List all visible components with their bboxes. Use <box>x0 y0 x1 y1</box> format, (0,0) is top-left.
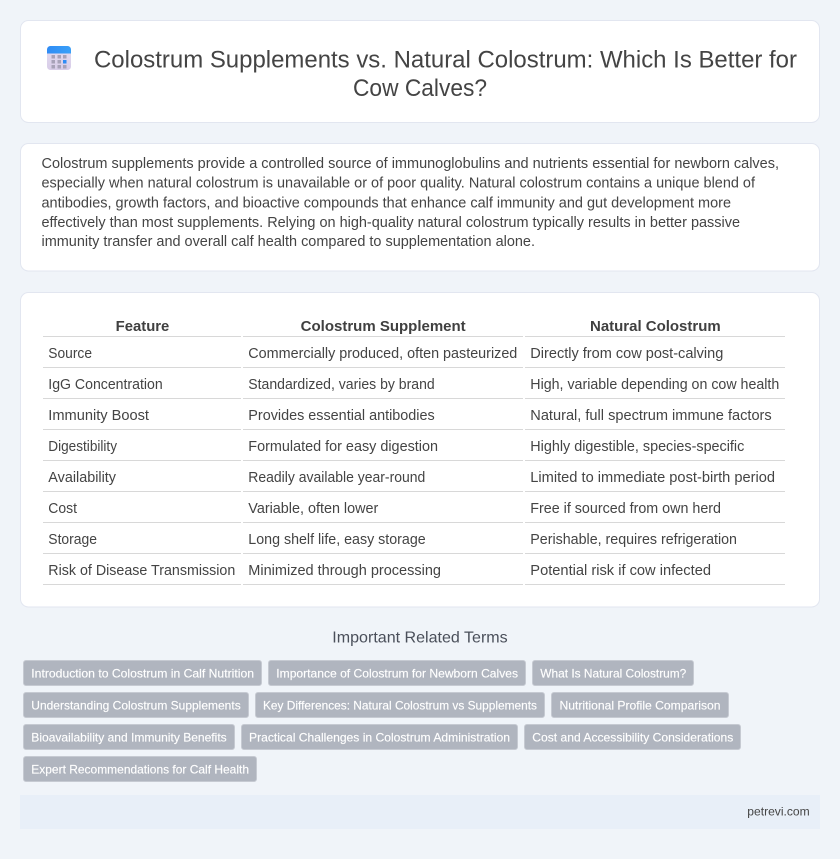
row: cost <box>48 501 721 517</box>
tag <box>256 692 544 718</box>
row: storage: Long shelf life, easy storage <box>248 532 426 548</box>
tag: Practical Challenges in Colostrum Administration <box>249 730 510 744</box>
row: storage <box>48 532 737 548</box>
row: availability <box>48 470 775 486</box>
tag <box>524 724 740 750</box>
text block: intro: effectively than most supplements. Relying on high-quality natural colostrum typically results in better passive <box>42 215 740 231</box>
row: digestibility <box>48 439 744 455</box>
tag: Key Differences: Natural Colostrum vs Supplements <box>263 698 537 712</box>
row: cost: Variable, often lower <box>248 501 379 517</box>
tag <box>24 724 234 750</box>
table header: Natural Colostrum <box>590 319 721 335</box>
tag: Introduction to Colostrum in Calf Nutrition <box>31 666 254 680</box>
row: IgG concentration: High, variable depending on cow health <box>530 377 779 393</box>
row: source: Source <box>48 346 92 362</box>
tag: Expert Recommendations for Calf Health <box>31 762 249 776</box>
table header: Colostrum Supplement <box>301 319 466 335</box>
row: availability: Readily available year-round <box>248 470 425 486</box>
row: risk of disease transmission <box>48 563 711 579</box>
footer: petrevi.com <box>747 805 810 819</box>
row: immunity boost: Immunity Boost <box>48 408 149 424</box>
row: source <box>48 346 723 362</box>
tag <box>24 660 262 686</box>
heading: important related terms: Important Related Terms <box>332 630 508 647</box>
row: storage: Perishable, requires refrigeration <box>530 532 737 548</box>
tag: Nutritional Profile Comparison <box>560 698 720 712</box>
row: immunity boost <box>48 408 772 424</box>
icon: calendar <box>47 46 71 70</box>
tag: Cost and Accessibility Considerations <box>532 730 733 744</box>
title: Cow Calves? <box>353 75 487 102</box>
text block: intro: immunity transfer and overall calf health compared to supplementation alone. <box>42 234 535 250</box>
row: cost: Cost <box>48 501 77 517</box>
row: IgG concentration: Standardized, varies by brand <box>248 377 435 393</box>
tag: Understanding Colostrum Supplements <box>31 698 241 712</box>
row: IgG concentration <box>48 377 779 393</box>
row: cost: Free if sourced from own herd <box>530 501 721 517</box>
row: risk of disease transmission: Potential risk if cow infected <box>530 563 711 579</box>
panel: intro paragraph <box>20 144 820 271</box>
tag <box>532 660 694 686</box>
table header: Feature <box>116 319 169 335</box>
row: source: Directly from cow post-calving <box>530 346 723 362</box>
row: IgG concentration: IgG Concentration <box>48 377 163 393</box>
row: availability: Limited to immediate post-birth period <box>530 470 775 486</box>
text block: intro: antibodies, growth factors, and bioactive compounds that enhance calf immunity and gut development more <box>42 195 731 211</box>
row: source: Commercially produced, often pasteurized <box>248 346 517 362</box>
row: risk of disease transmission: Minimized through processing <box>248 563 441 579</box>
panel: related term tags <box>24 660 740 782</box>
tag <box>552 692 728 718</box>
tag <box>268 660 526 686</box>
row: digestibility: Formulated for easy digestion <box>248 439 438 455</box>
tag <box>242 724 518 750</box>
tag <box>24 692 248 718</box>
tag: Importance of Colostrum for Newborn Calves <box>276 666 518 680</box>
row: risk of disease transmission: Risk of Disease Transmission <box>48 563 235 579</box>
text block: intro <box>42 156 779 250</box>
row: storage: Storage <box>48 532 97 548</box>
panel: comparison table <box>20 292 820 607</box>
text block: intro: Colostrum supplements provide a controlled source of immunoglobulins and nutrients essential for newborn calves, <box>42 156 779 172</box>
row: digestibility: Digestibility <box>48 439 118 455</box>
tag: Bioavailability and Immunity Benefits <box>31 730 227 744</box>
row: digestibility: Highly digestible, species-specific <box>530 439 744 455</box>
title: Colostrum Supplements vs. Natural Colostrum: Which Is Better for <box>94 46 797 74</box>
row: immunity boost: Provides essential antibodies <box>248 408 435 424</box>
table header <box>116 319 721 335</box>
tag <box>24 756 256 782</box>
tag: What Is Natural Colostrum? <box>540 666 687 680</box>
row: immunity boost: Natural, full spectrum immune factors <box>530 408 772 424</box>
title <box>94 46 797 102</box>
row: availability: Availability <box>48 470 117 486</box>
text block: intro: especially when natural colostrum is unavailable or of poor quality. Natural colostrum contains a unique blend of <box>42 176 756 192</box>
panel: title card <box>20 20 820 122</box>
footer <box>20 795 820 829</box>
